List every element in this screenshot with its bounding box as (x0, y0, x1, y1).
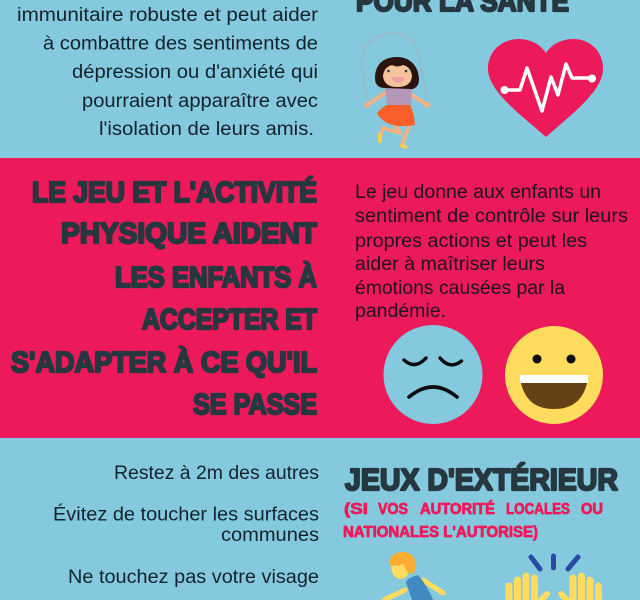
panel: pink band on accepting and adapting (0, 158, 640, 438)
text block: safety guidance: Ne touchez pas votre visage (68, 567, 319, 588)
heading: play and physical activity help children: SE PASSE (193, 389, 317, 421)
note: local authorities permission (343, 501, 603, 541)
note: local authorities permission: VOS (378, 501, 408, 518)
heading: play and physical activity help children: PHYSIQUE AIDENT (61, 218, 317, 250)
heading: play and physical activity help children: LE JEU ET L'ACTIVITÉ (32, 175, 317, 209)
note: local authorities permission: OU (581, 501, 603, 518)
heading: play and physical activity help children: ACCEPTER ET (142, 304, 317, 336)
heading: play and physical activity help children: S'ADAPTER À CE QU'IL (11, 345, 317, 379)
panel: top health benefits (0, 0, 640, 158)
text block: safety guidance: Restez à 2m des autres (114, 463, 319, 484)
text block: safety guidance: communes (221, 525, 319, 546)
text block: sense of control: Le jeu donne aux enfants un (355, 182, 601, 203)
note: local authorities permission: LOCALES (506, 501, 570, 518)
note: local authorities permission: (SI (344, 501, 368, 518)
text block: sense of control: propres actions et peut les (355, 231, 587, 252)
text block: sense of control: aider à maîtriser leurs (355, 254, 545, 275)
text block: immune system benefits: pourraient apparaître avec (82, 91, 318, 112)
note: local authorities permission: NATIONALES L'AUTORISE) (343, 524, 538, 541)
panel: outdoor games (0, 438, 640, 600)
text block: sense of control: sentiment de contrôle sur leurs (355, 206, 628, 227)
text block: immune system benefits: immunitaire robuste et peut aider (17, 5, 319, 26)
icon: girl jumping rope (362, 33, 430, 147)
icon: laughing face (505, 326, 603, 424)
text block: immune system benefits (17, 5, 319, 140)
text block: immune system benefits: l'isolation de leurs amis. (99, 119, 314, 140)
icon: running child (384, 552, 443, 600)
text block: sense of control (355, 182, 628, 322)
icon: heart with heartbeat (488, 39, 603, 137)
text block: immune system benefits: dépression ou d'anxiété qui (72, 62, 318, 83)
heading: play and physical activity help children: LES ENFANTS À (115, 260, 317, 294)
icon: sad face (384, 325, 482, 424)
note: local authorities permission: AUTORITÉ (420, 501, 495, 518)
text block: immune system benefits: à combattre des sentiments de (43, 34, 318, 54)
heading: play and physical activity help children (11, 175, 317, 421)
text block: sense of control: pandémie. (355, 301, 446, 322)
text block: sense of control: émotions causées par la (355, 278, 565, 299)
heading: jeux d'extérieur: JEUX D'EXTÉRIEUR (345, 462, 618, 497)
text block: safety guidance (53, 463, 319, 588)
icon: high five hands (509, 556, 598, 600)
text block: safety guidance: Évitez de toucher les surfaces (53, 504, 319, 526)
